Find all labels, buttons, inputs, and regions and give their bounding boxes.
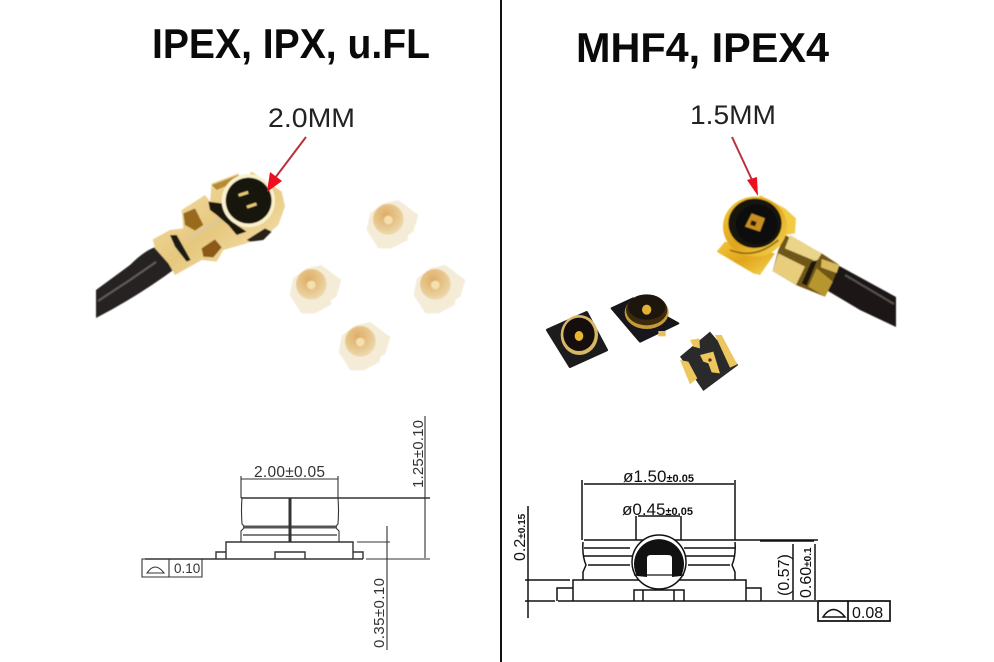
left dimension labels: 1.25±0.10 — [410, 420, 427, 488]
black connectors — [547, 294, 738, 391]
left technical drawing — [142, 416, 430, 650]
four gold connectors — [290, 200, 465, 370]
right dimension labels: 0.08 — [852, 605, 883, 622]
label: 2.0MM: 2.0MM — [268, 103, 355, 133]
right dimension labels — [512, 467, 883, 622]
title: IPEX, IPX, u.FL: IPEX, IPX, u.FL — [152, 20, 430, 67]
left dimension labels — [174, 420, 427, 648]
title: MHF4, IPEX4: MHF4, IPEX4 — [576, 24, 830, 71]
centre divider — [500, 0, 502, 662]
right technical drawing — [525, 480, 890, 621]
right dimension labels: (0.57) — [776, 554, 793, 596]
right dimension labels: ø1.50±0.05 — [623, 467, 694, 486]
left cable connector photo — [96, 172, 285, 318]
label: 1.5MM: 1.5MM — [690, 100, 776, 130]
icon: black socket — [222, 174, 275, 227]
right cable connector photo — [717, 195, 896, 327]
left dimension labels: 0.35±0.10 — [371, 578, 388, 648]
left dimension labels: 2.00±0.05 — [254, 464, 325, 481]
icon: black socket — [728, 199, 782, 248]
right dimension labels: ø0.45±0.05 — [622, 500, 693, 519]
left dimension labels: 0.10 — [174, 561, 200, 576]
right red arrow — [732, 137, 758, 196]
right dimension labels: 0.60±0.1 — [798, 547, 815, 598]
left red arrow — [267, 137, 306, 192]
right dimension labels: 0.2±0.15 — [512, 513, 529, 561]
